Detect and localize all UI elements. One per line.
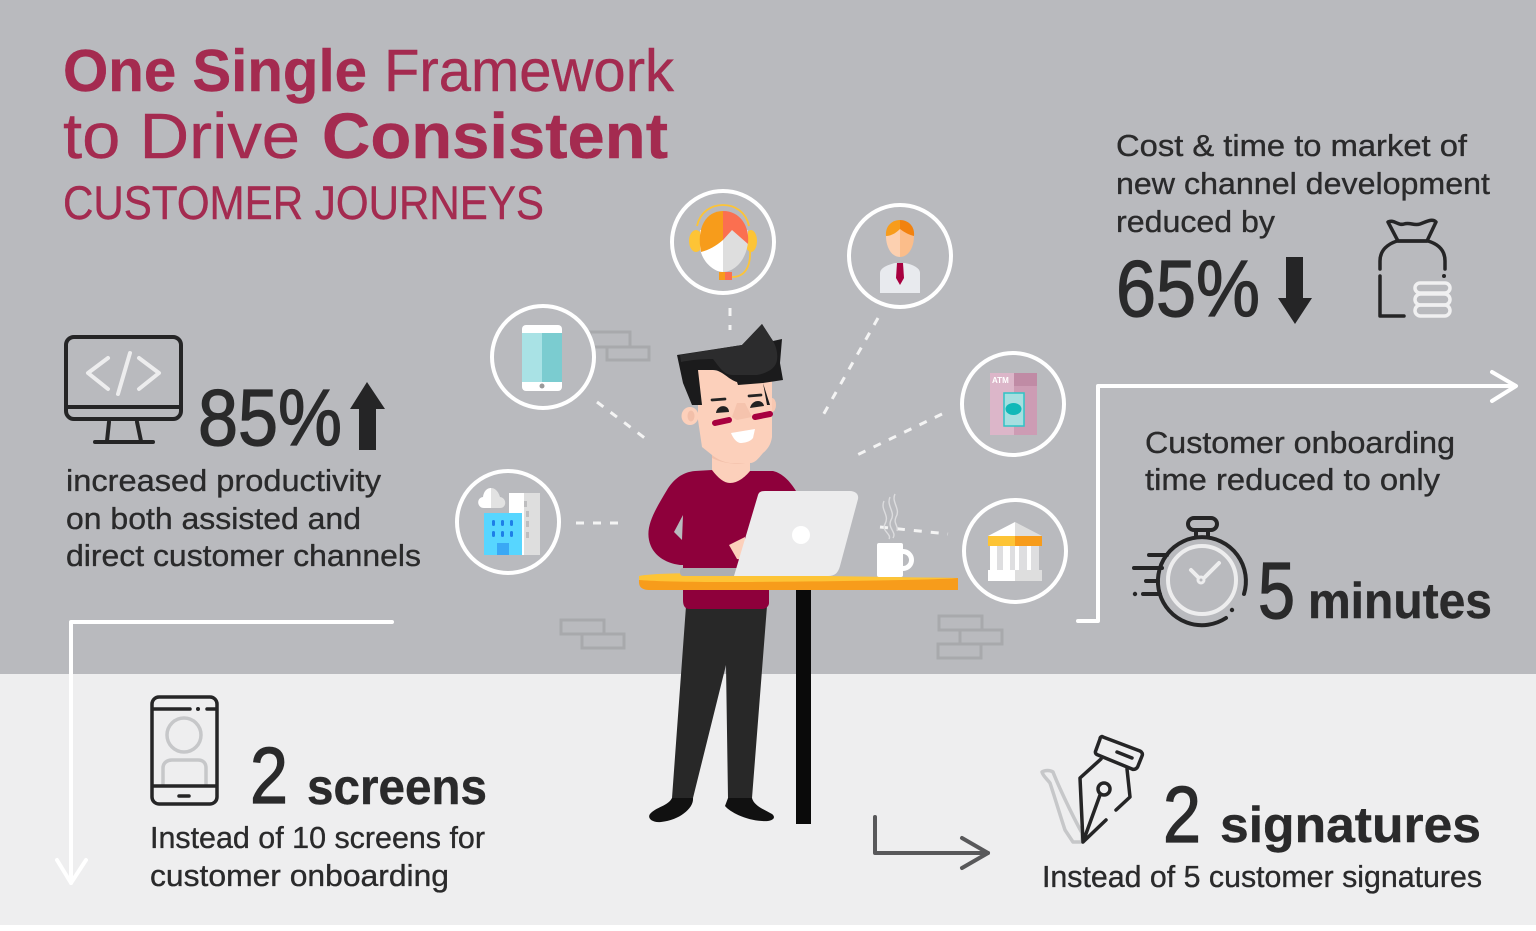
man: face [698, 368, 772, 463]
man: neck [712, 440, 750, 483]
icon: bank building in circle [964, 500, 1066, 602]
arrow: dark connector to signatures [875, 817, 988, 868]
background: lower light floor [0, 674, 1536, 925]
dashed connector lines [576, 308, 948, 534]
table [639, 573, 958, 824]
unit: minutes: minutes [1308, 573, 1492, 629]
value: 5: 5 [1258, 546, 1295, 635]
stat: 85% productivity [66, 337, 421, 573]
icon: money bag [1380, 220, 1450, 316]
description: Cost & time to market of [1116, 128, 1467, 163]
title: CUSTOMER JOURNEYS [63, 176, 544, 229]
description: direct customer channels [66, 538, 421, 573]
value: 85%: 85% [198, 373, 342, 462]
description: time reduced to only [1145, 462, 1441, 497]
man: chin shadow [712, 450, 750, 464]
man: blush marks [715, 414, 770, 423]
title [63, 38, 674, 229]
man: trousers [672, 606, 767, 798]
icon: up arrow [350, 382, 385, 450]
icon: stopwatch [1133, 518, 1246, 625]
description: customer onboarding [150, 858, 449, 893]
background bricks left of man [561, 620, 624, 648]
title: to Drive [63, 100, 300, 172]
title: Framework [384, 38, 674, 104]
icon: ATM in circle [962, 353, 1064, 455]
value: 2: 2 [1163, 770, 1201, 859]
value: 65%: 65% [1116, 244, 1260, 333]
stat: 5 minutes onboarding [1133, 425, 1492, 635]
man: right ear [768, 398, 776, 412]
value: 2: 2 [250, 731, 288, 820]
laptop with keyboard edge [680, 491, 858, 576]
stat: 65% cost reduction [1116, 128, 1490, 333]
coffee mug with steam [877, 494, 912, 577]
description: increased productivity [66, 463, 382, 498]
man: smile [731, 429, 755, 443]
icon: down arrow [1278, 257, 1312, 324]
description: on both assisted and [66, 501, 361, 536]
background bricks right of table [938, 616, 1002, 658]
description [1145, 425, 1455, 497]
man: arm gap [674, 515, 683, 540]
icon: smartphone in circle [492, 306, 594, 408]
title: Consistent [322, 100, 668, 172]
unit: screens: screens [307, 759, 487, 815]
man: hair [677, 324, 783, 405]
man: inner ear [688, 410, 694, 422]
description [150, 820, 485, 893]
icon: branch building with cloud in circle [457, 471, 559, 573]
stat: 2 signatures [1042, 737, 1482, 894]
stat: 2 screens [150, 697, 487, 893]
description: Instead of 10 screens for [150, 820, 485, 855]
description: new channel development [1116, 166, 1490, 201]
man: sweater [648, 470, 800, 609]
man: shoes [649, 798, 774, 822]
description: reduced by [1116, 204, 1276, 239]
illustration: man [648, 324, 800, 822]
background: upper grey wall [0, 0, 1536, 674]
arrow: white down-pointing connector [57, 622, 392, 883]
man: hand [729, 537, 745, 560]
description: Instead of 5 customer signatures [1042, 859, 1482, 894]
icon: fountain pen [1042, 737, 1142, 842]
man: eyes [716, 401, 764, 413]
man: ear [682, 407, 698, 425]
icon: bank advisor in circle [849, 205, 951, 307]
icon: code monitor [66, 337, 181, 442]
description [1116, 128, 1490, 239]
arrow: white right-pointing connector [1078, 372, 1516, 621]
description [66, 463, 421, 573]
description: Customer onboarding [1145, 425, 1455, 460]
title: One Single [63, 38, 367, 104]
man: nose [732, 403, 752, 420]
icon: phone with portrait [152, 697, 217, 804]
icon: call centre agent in circle [672, 191, 774, 293]
unit: signatures: signatures [1220, 797, 1481, 853]
background bricks near phone [590, 332, 649, 360]
icon: ATM in circle: ATM [992, 376, 1009, 385]
man: eyebrows [712, 395, 761, 400]
man: hair highlight [680, 324, 777, 375]
